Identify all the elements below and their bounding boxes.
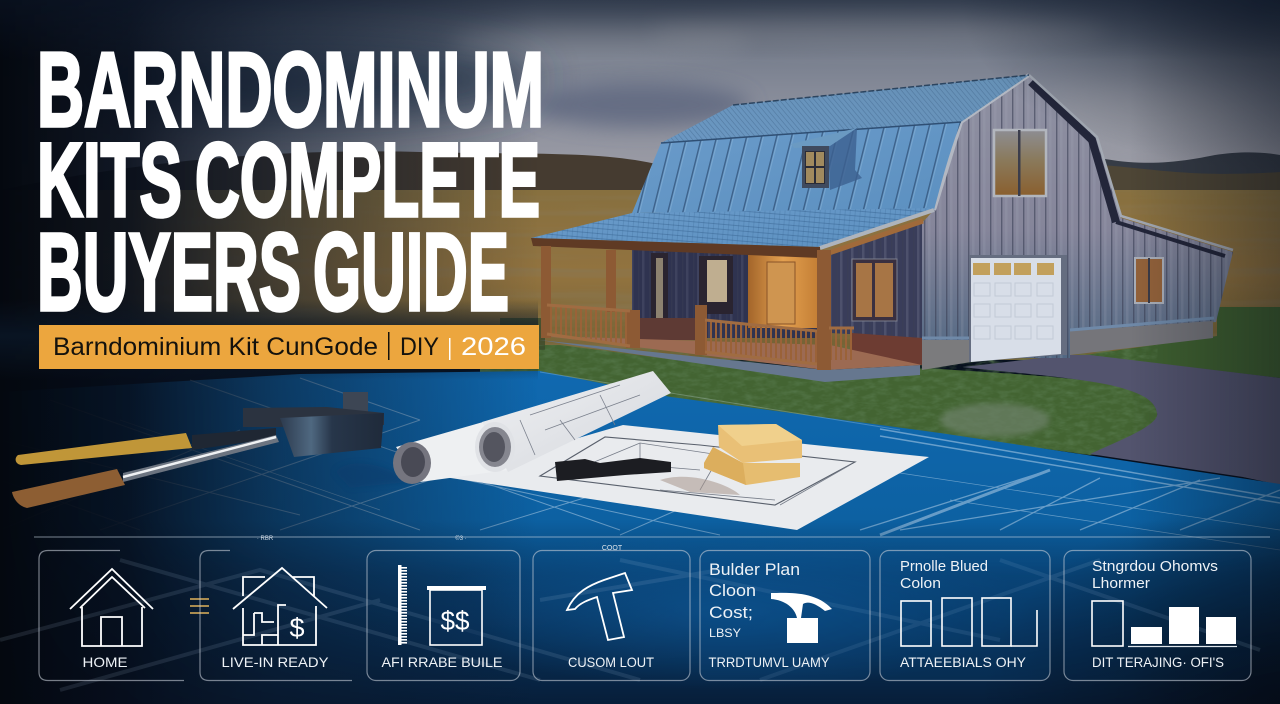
- bar chart: [1092, 601, 1237, 646]
- panel: custom layout: [533, 545, 690, 680]
- panel: strength chart: Stngrdou Ohomvs: [1092, 559, 1218, 575]
- panel: live-in ready: $: [289, 613, 305, 643]
- panel: affordable build: [367, 550, 520, 680]
- panel: strength chart: [1064, 550, 1251, 680]
- porch back wall: [632, 250, 832, 340]
- title: COMPLETE: [195, 122, 540, 239]
- divider with tiny captions: ©3 ·: [455, 535, 467, 542]
- dormer: [791, 128, 862, 190]
- panel: builder plan cost: LBSY: [709, 626, 741, 640]
- lawn: [480, 307, 1280, 484]
- side window: [1135, 258, 1163, 303]
- panel: profile blued colon: ATTAEEBIALS OHY: [900, 654, 1027, 670]
- panel: builder plan cost: [700, 550, 870, 680]
- sky background: [0, 0, 1280, 200]
- panel: custom layout: CUSOM LOUT: [568, 654, 654, 670]
- rolled blueprints: [335, 371, 671, 488]
- icon: gold equals lines: [190, 599, 209, 613]
- icon: hammer outline: [567, 573, 632, 640]
- panel: profile blued colon: Colon: [900, 576, 941, 592]
- panel: live-in ready: LIVE-IN READY: [222, 654, 329, 670]
- panel: home: HOME: [82, 654, 128, 670]
- panel: profile blued colon: [880, 550, 1050, 680]
- porch side wall: [830, 223, 922, 365]
- icon: outlined bars: [901, 598, 1037, 646]
- panel: affordable build: AFI RRABE BUILE: [382, 654, 502, 670]
- panel: strength chart: Lhormer: [1092, 576, 1150, 592]
- panel: profile blued colon: Prnolle Blued: [900, 559, 988, 575]
- upper window: [994, 130, 1046, 196]
- icon: dollar box: [427, 586, 486, 645]
- subtitle banner: [39, 325, 539, 369]
- panel: builder plan cost: Bulder Plan: [709, 560, 800, 579]
- upper roof: [661, 75, 1029, 143]
- foundation: [922, 318, 1214, 370]
- porch floor: [539, 336, 922, 382]
- title: KITS: [37, 122, 182, 239]
- porch railings: [547, 305, 854, 364]
- divider with tiny captions: · RBR: [257, 536, 274, 542]
- gable wall: [922, 75, 1233, 358]
- title: [37, 31, 544, 334]
- panel: builder plan cost: Cost;: [709, 603, 753, 622]
- title: GUIDE: [313, 211, 509, 334]
- hand tools: [12, 392, 384, 508]
- title: BUYERS: [37, 211, 301, 334]
- blueprint grid lines: [0, 372, 1280, 550]
- fields: [0, 190, 1280, 360]
- blueprint sheet: [444, 425, 929, 530]
- icon: home: [70, 569, 153, 646]
- distant hills: [0, 151, 1280, 200]
- panel: builder plan cost: Cloon: [709, 581, 756, 600]
- driveway: [963, 355, 1280, 485]
- subtitle banner: DIY: [400, 333, 439, 361]
- panel: custom layout: COOT: [602, 545, 623, 552]
- small black connector: [555, 458, 671, 481]
- panel: home: [39, 550, 184, 680]
- subtitle banner: Barndominium Kit CunGode: [53, 333, 378, 361]
- porch frame: [531, 238, 831, 370]
- panel: strength chart: DIT TERAJING· OFI'S: [1092, 654, 1224, 670]
- subtitle banner: 2026: [461, 333, 526, 361]
- icon: dollar box: $$: [440, 606, 470, 636]
- panel: builder plan cost: TRRDTUMVL UAMY: [708, 654, 830, 670]
- barndominium house: [531, 75, 1233, 382]
- porch roof: [531, 208, 934, 254]
- panel: live-in ready: [200, 550, 352, 680]
- garage door: [969, 255, 1067, 362]
- title: BARNDOMINUM: [37, 31, 544, 149]
- icon: solid hammer: [771, 593, 832, 643]
- divider with tiny captions: [34, 535, 1270, 542]
- icon: ruler: [398, 565, 407, 645]
- wood blocks: [704, 424, 802, 485]
- lower roof: [632, 122, 961, 213]
- blueprint table: [0, 371, 1280, 704]
- icon: house with dollar: [233, 568, 327, 645]
